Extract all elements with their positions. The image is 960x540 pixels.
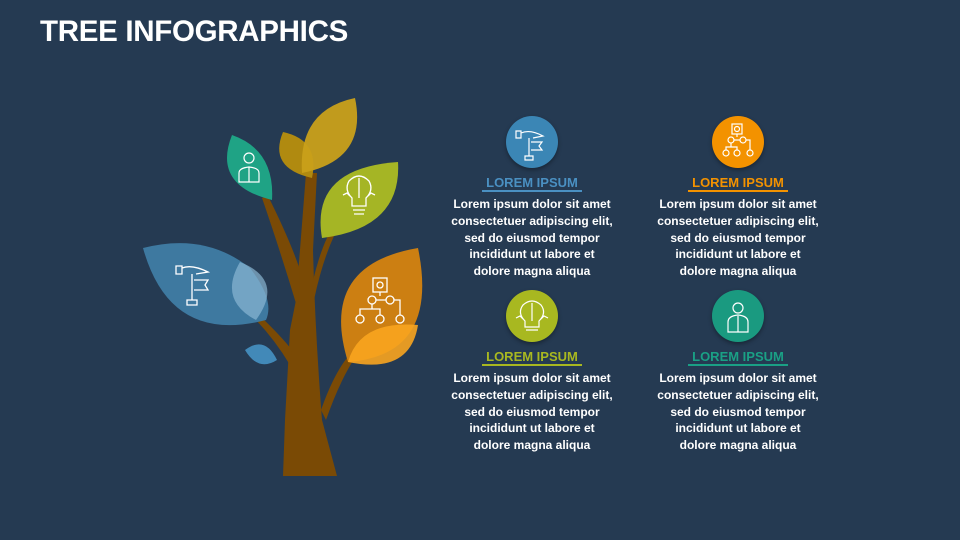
icon circle: teal — [712, 290, 764, 342]
text: Lorem ipsum dolor sit amet — [659, 197, 817, 211]
trunk and branches — [256, 173, 356, 476]
text: Lorem ipsum dolor sit amet — [453, 371, 611, 385]
text: consectetuer adipiscing elit, — [657, 214, 819, 228]
card: teal — [657, 290, 819, 452]
heading: LOREM IPSUM — [692, 175, 784, 190]
leaf: small yellow — [279, 132, 313, 178]
leaf: light blue overlay — [232, 262, 267, 320]
text: sed do eiusmod tempor — [670, 231, 806, 245]
card: green — [451, 290, 613, 452]
text: consectetuer adipiscing elit, — [657, 388, 819, 402]
leaf: teal — [227, 135, 272, 200]
text: dolore magna aliqua — [680, 438, 796, 452]
text: incididunt ut labore et — [675, 247, 801, 261]
text — [451, 371, 613, 452]
text: incididunt ut labore et — [469, 421, 595, 435]
text: Lorem ipsum dolor sit amet — [659, 371, 817, 385]
text: consectetuer adipiscing elit, — [451, 214, 613, 228]
text: incididunt ut labore et — [469, 247, 595, 261]
text: Lorem ipsum dolor sit amet — [453, 197, 611, 211]
icon circle: green — [506, 290, 558, 342]
icon: org chart on orange — [356, 278, 404, 323]
text: consectetuer adipiscing elit, — [451, 388, 613, 402]
text — [657, 371, 819, 452]
icon: hand flag on blue — [176, 266, 208, 305]
card: blue — [451, 116, 613, 278]
icon circle: orange — [712, 116, 764, 168]
leaf: big blue — [143, 243, 268, 325]
leaf: small blue — [245, 344, 277, 364]
text: sed do eiusmod tempor — [464, 231, 600, 245]
text: dolore magna aliqua — [474, 438, 590, 452]
text — [451, 197, 613, 278]
icon circle: blue — [506, 116, 558, 168]
text: incididunt ut labore et — [675, 421, 801, 435]
text — [657, 197, 819, 278]
title: TREE INFOGRAPHICS — [40, 15, 348, 48]
heading: LOREM IPSUM — [486, 175, 578, 190]
icon: brain bulb on green — [343, 176, 375, 214]
leaf: orange — [341, 248, 422, 362]
text: sed do eiusmod tempor — [670, 405, 806, 419]
text: dolore magna aliqua — [474, 264, 590, 278]
heading: LOREM IPSUM — [486, 349, 578, 364]
leaf: big yellow — [302, 98, 357, 173]
leaf: light orange — [348, 324, 418, 365]
text: dolore magna aliqua — [680, 264, 796, 278]
icon: person on teal — [239, 153, 259, 182]
leaf: green — [321, 162, 398, 238]
card: orange — [657, 116, 819, 278]
text: sed do eiusmod tempor — [464, 405, 600, 419]
heading: LOREM IPSUM — [692, 349, 784, 364]
